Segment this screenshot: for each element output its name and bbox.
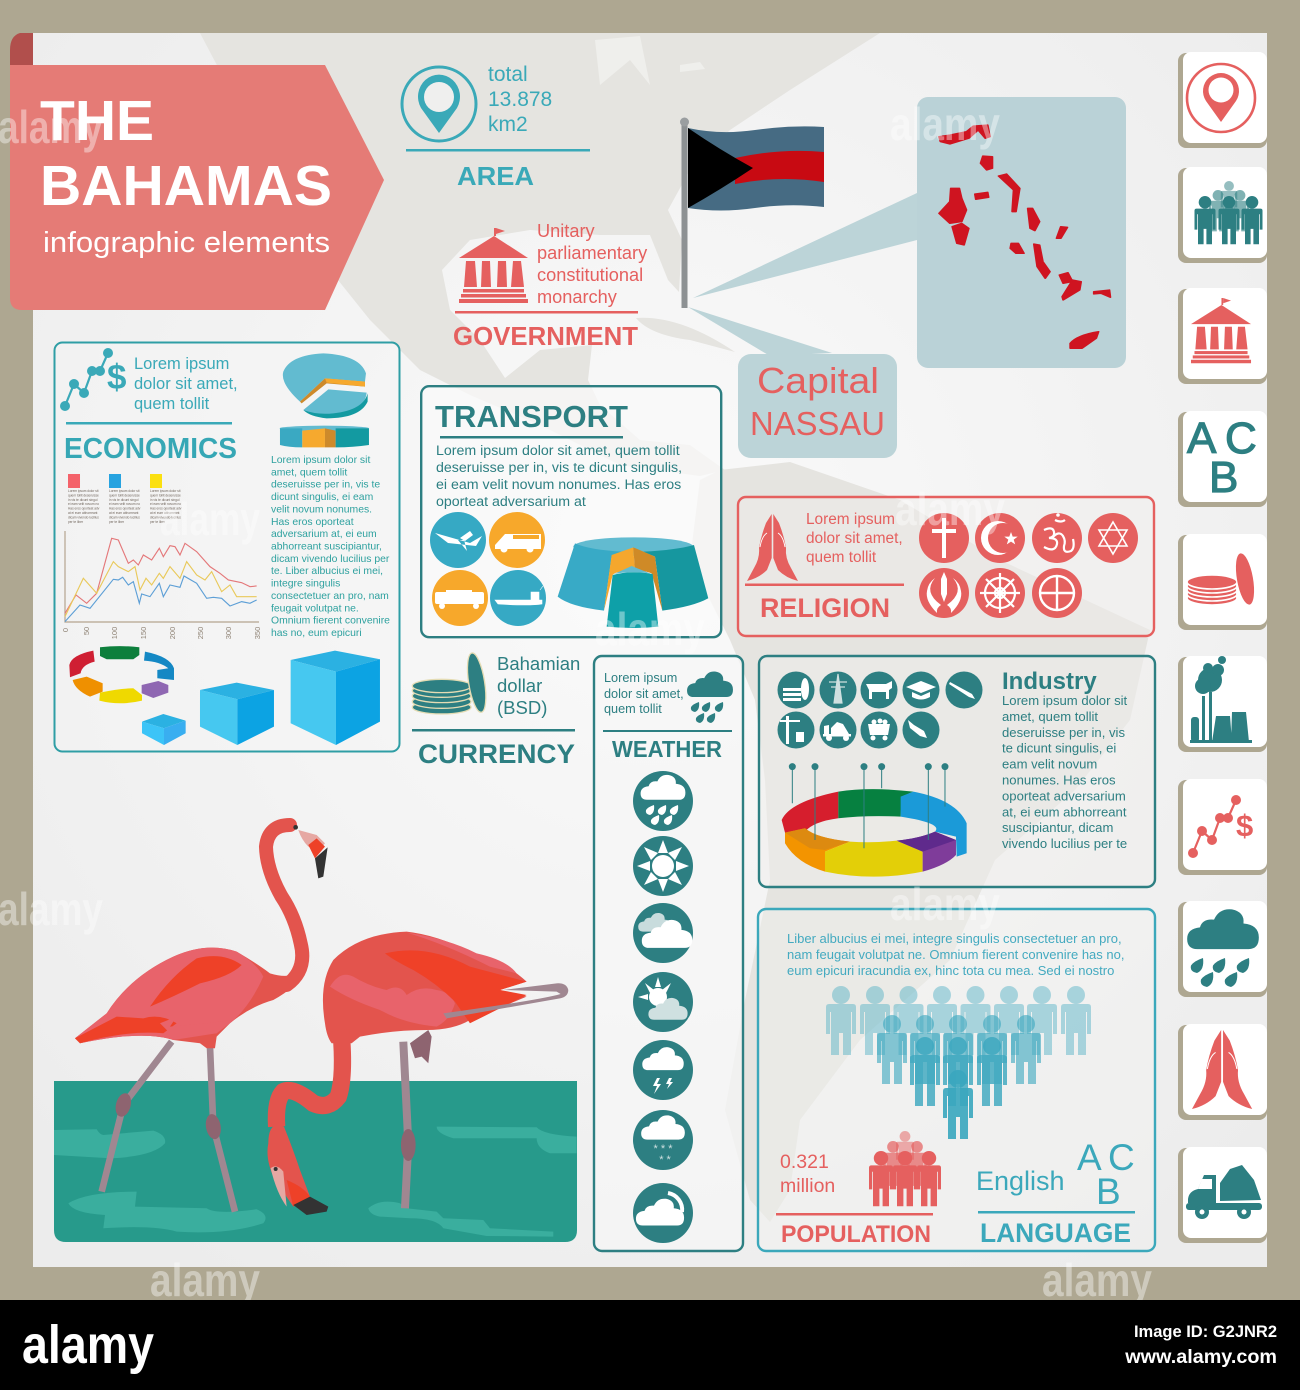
chart legend: ei eam velit novum no bbox=[68, 502, 99, 506]
industry body text: amet, quem tollit bbox=[1002, 709, 1098, 724]
icon: sun bbox=[633, 836, 693, 896]
icon: airplane bbox=[430, 512, 486, 568]
area block: 13.878 bbox=[488, 88, 552, 111]
currency block: CURRENCY bbox=[418, 739, 575, 769]
economics body text: velit novum nonumes. bbox=[271, 504, 372, 515]
icon: rain bbox=[633, 771, 693, 831]
tile: population bbox=[1178, 167, 1267, 263]
chart: line chart: 200 bbox=[168, 627, 177, 639]
currency block: dollar bbox=[497, 675, 542, 696]
tile: weather bbox=[1178, 901, 1267, 997]
religion intro text: Lorem ipsum bbox=[806, 511, 895, 528]
icon: sun and cloud bbox=[633, 972, 693, 1032]
population heading: POPULATION bbox=[781, 1221, 931, 1248]
population intro text: eum epicuri iracundia ex, hinc tota cu mea. Sed ei nostro bbox=[787, 963, 1114, 978]
stock watermarks bbox=[0, 98, 1152, 1306]
economics body text: amet, quem tollit bbox=[271, 467, 347, 478]
economics intro text: quem tollit bbox=[134, 395, 210, 413]
religion intro text: quem tollit bbox=[806, 549, 877, 566]
capital callout bbox=[738, 354, 897, 458]
chart: line chart: 250 bbox=[196, 627, 205, 639]
transport body text: Lorem ipsum dolor sit amet, quem tollit bbox=[436, 443, 680, 459]
industry body text: nonumes. Has eros bbox=[1002, 772, 1116, 788]
currency block: Bahamian bbox=[497, 653, 580, 674]
language label: English bbox=[976, 1166, 1065, 1196]
economics intro text: Lorem ipsum bbox=[134, 355, 229, 373]
tile: currency bbox=[1178, 534, 1267, 630]
chart: line chart: 100 bbox=[110, 627, 119, 639]
transport body text: ei eam velit novum nonumes. Has eros bbox=[436, 477, 681, 493]
panel: religion bbox=[738, 497, 1154, 636]
icon: moon and cloud bbox=[633, 1183, 693, 1243]
area block: km2 bbox=[488, 113, 528, 136]
icon: thunderstorm bbox=[633, 1040, 693, 1100]
chart legend: Has eros oporteat adv bbox=[109, 507, 141, 511]
tile: economics bbox=[1178, 779, 1267, 875]
pictogram: crowd bbox=[826, 986, 1091, 1139]
chart: line chart: 350 bbox=[253, 627, 262, 639]
chart: line chart: 50 bbox=[82, 627, 91, 635]
economics body text: integre singulis bbox=[271, 579, 340, 590]
panel: weather bbox=[594, 656, 743, 1251]
industry body text: Lorem ipsum dolor sit bbox=[1002, 693, 1128, 708]
chart legend: per te liber bbox=[150, 520, 166, 524]
industry body text: eam velit novum bbox=[1002, 757, 1097, 772]
chart legend: dicam vivendo lucilius bbox=[109, 515, 140, 519]
chart legend: at ei eum abhorreant bbox=[109, 511, 139, 515]
language heading: LANGUAGE bbox=[980, 1218, 1131, 1248]
chart legend: Lorem ipsum dolor sit bbox=[109, 489, 140, 493]
title text: infographic elements bbox=[43, 227, 330, 259]
economics intro text: dolor sit amet, bbox=[134, 375, 238, 393]
icon: government building bbox=[459, 228, 528, 303]
water ripples bbox=[54, 1127, 577, 1237]
chart legend: in vis te dicunt singul bbox=[150, 498, 180, 502]
economics body text: adversarium at, ei eum bbox=[271, 529, 377, 540]
tile: language: A bbox=[1187, 414, 1217, 463]
currency block bbox=[412, 652, 580, 769]
chart legend: ei eam velit novum no bbox=[109, 502, 140, 506]
footer url: www.alamy.com bbox=[1124, 1346, 1277, 1368]
icon: truck bbox=[820, 712, 856, 748]
industry body text: deseruisse per in, vis bbox=[1002, 725, 1125, 740]
chart legend: in vis te dicunt singul bbox=[109, 498, 139, 502]
icon: coins bbox=[412, 652, 489, 714]
chart: 3d pie bbox=[558, 537, 708, 628]
flamingo: feeding bbox=[267, 932, 568, 1215]
icon: power pylon bbox=[820, 672, 856, 708]
economics body text: has no, eum epicuri bbox=[271, 628, 362, 639]
icon: red people bbox=[869, 1131, 941, 1206]
economics body text: Has eros oporteat bbox=[271, 517, 354, 528]
icon: crane and factory bbox=[778, 712, 814, 748]
population intro text: nam feugait volutpat ne. Omnium fierent convenire has no, bbox=[787, 947, 1124, 962]
industry body text: at, ei eum abhorreant bbox=[1002, 804, 1127, 819]
icon: ship bbox=[490, 570, 546, 626]
weather intro text: dolor sit amet, bbox=[604, 687, 684, 701]
industry heading: Industry bbox=[1002, 668, 1097, 695]
chart legend: quem tollit deseruisse bbox=[150, 493, 181, 497]
panel: transport bbox=[421, 386, 721, 637]
stock watermarks: alamy bbox=[150, 1254, 260, 1306]
chart legend bbox=[68, 474, 182, 524]
icon: cattle bbox=[860, 672, 898, 708]
economics body text: dicunt singulis, ei eam bbox=[271, 492, 373, 503]
chart: segmented ring bbox=[69, 646, 174, 703]
icon: coins bbox=[778, 672, 814, 708]
weather intro text: quem tollit bbox=[604, 702, 662, 716]
water bbox=[54, 1081, 577, 1242]
chart: isometric cubes bbox=[142, 651, 380, 745]
map gaps: great lakes bbox=[595, 36, 705, 85]
industry body text: te dicunt singulis, ei bbox=[1002, 741, 1116, 756]
world map backdrop bbox=[200, 33, 1150, 1222]
footer logo: alamy bbox=[22, 1315, 154, 1375]
icon: rifle bbox=[946, 672, 982, 708]
icon: star of david bbox=[1088, 513, 1138, 563]
icon: christian cross bbox=[919, 513, 969, 563]
chart legend: dicam vivendo lucilius bbox=[68, 515, 99, 519]
economics body text: dicam vivendo lucilius per bbox=[271, 554, 390, 565]
panel: industry bbox=[759, 656, 1155, 887]
economics heading: ECONOMICS bbox=[64, 433, 237, 465]
stock watermarks: alamy bbox=[0, 883, 103, 935]
stock watermarks: alamy bbox=[1042, 1254, 1152, 1306]
language letters bbox=[1077, 1137, 1135, 1212]
tile: economics: $ bbox=[1236, 808, 1253, 843]
icon: location pin bbox=[402, 67, 476, 141]
icon: syringe bbox=[902, 712, 940, 748]
economics body text: Omnium fierent convenire bbox=[271, 616, 390, 627]
government block: constitutional bbox=[537, 265, 643, 285]
stock watermarks: alamy bbox=[890, 98, 1000, 150]
population figure: million bbox=[780, 1175, 835, 1197]
economics body text: Lorem ipsum dolor sit bbox=[271, 455, 370, 466]
tile: mining truck bbox=[1178, 1147, 1267, 1243]
flag of the Bahamas bbox=[680, 118, 824, 308]
government block: Unitary bbox=[537, 221, 596, 241]
sidebar icon tiles bbox=[1178, 52, 1267, 1243]
economics body text: te. Liber albucius ei mei, bbox=[271, 566, 383, 577]
economics body text: consectetuer an pro, nam bbox=[271, 591, 389, 602]
title text bbox=[40, 89, 332, 259]
icon: cloudy bbox=[633, 903, 693, 963]
area block: AREA bbox=[457, 161, 534, 191]
religion heading: RELIGION bbox=[760, 593, 890, 623]
chart legend: quem tollit deseruisse bbox=[109, 493, 140, 497]
chart legend: quem tollit deseruisse bbox=[68, 493, 99, 497]
language letters: A bbox=[1077, 1137, 1102, 1178]
chart legend: at ei eum abhorreant bbox=[68, 511, 98, 515]
illustration: flamingos in water bbox=[54, 825, 577, 1242]
currency block: (BSD) bbox=[497, 697, 547, 718]
capital callout: NASSAU bbox=[750, 405, 885, 442]
icon: praying hands bbox=[747, 514, 798, 581]
icon: graduation cap bbox=[902, 672, 940, 708]
chart legend: dicam vivendo lucilius bbox=[150, 515, 181, 519]
chart legend: ei eam velit novum no bbox=[150, 502, 181, 506]
tile: industry bbox=[1178, 656, 1267, 752]
icon: snow: * * * bbox=[654, 1143, 673, 1155]
chart legend: Lorem ipsum dolor sit bbox=[150, 489, 181, 493]
economics body text: deseruisse per in, vis te bbox=[271, 480, 380, 491]
stock watermarks: alamy bbox=[0, 101, 103, 153]
chart legend: at ei eum abhorreant bbox=[150, 511, 180, 515]
stock watermarks: alamy bbox=[895, 483, 1005, 535]
flamingo: standing bbox=[75, 825, 328, 1212]
panel: economics bbox=[54, 342, 400, 752]
economics body text: feugait volutpat ne. bbox=[271, 603, 359, 614]
callout wedges bbox=[688, 193, 917, 356]
stock watermarks: alamy bbox=[595, 603, 705, 655]
government block: parliamentary bbox=[537, 243, 648, 263]
transport body text: deseruisse per in, vis te dicunt singulis, bbox=[436, 460, 682, 476]
icon: circled cross bbox=[1032, 568, 1082, 618]
chart legend: Lorem ipsum dolor sit bbox=[68, 489, 99, 493]
stock watermarks: alamy bbox=[160, 493, 260, 545]
language letters: B bbox=[1096, 1171, 1121, 1212]
chart legend: per te liber bbox=[68, 520, 84, 524]
icon: train bbox=[432, 570, 488, 626]
industry body text: vivendo lucilius per te bbox=[1002, 836, 1127, 851]
chart: line chart bbox=[61, 531, 262, 639]
population intro text: Liber albucius ei mei, integre singulis consectetuer an pro, bbox=[787, 931, 1122, 946]
industry body text: oporteat adversarium bbox=[1002, 788, 1126, 803]
map islands bbox=[939, 125, 1110, 348]
area block bbox=[402, 63, 590, 191]
icon: snow bbox=[633, 1110, 693, 1170]
government block bbox=[453, 221, 648, 351]
icon: snow: * * bbox=[659, 1154, 672, 1166]
weather heading: WEATHER bbox=[612, 736, 722, 762]
footer bar bbox=[0, 1300, 1300, 1390]
stock watermarks: alamy bbox=[890, 878, 1000, 930]
language letters: C bbox=[1108, 1137, 1135, 1178]
tile: language: C bbox=[1225, 414, 1257, 463]
chart: line chart: 300 bbox=[224, 627, 233, 639]
chart: 3d ring bbox=[782, 764, 967, 877]
religion intro text: dolor sit amet, bbox=[806, 530, 903, 547]
icon: trend and dollar: $ bbox=[107, 358, 126, 397]
map of the Bahamas panel bbox=[917, 97, 1126, 368]
icon: om bbox=[1032, 513, 1082, 563]
transport heading: TRANSPORT bbox=[435, 399, 628, 434]
title text: BAHAMAS bbox=[40, 154, 332, 218]
tile: government bbox=[1178, 288, 1267, 384]
icon: khanda bbox=[919, 568, 969, 618]
icon: bus bbox=[489, 512, 545, 568]
chart legend: per te liber bbox=[109, 520, 125, 524]
title text: THE bbox=[40, 89, 154, 153]
tile: area bbox=[1178, 52, 1267, 148]
government block: monarchy bbox=[537, 287, 618, 307]
title banner bbox=[10, 33, 384, 310]
government block: GOVERNMENT bbox=[453, 323, 638, 351]
transport body text: oporteat adversarium at bbox=[436, 494, 586, 510]
chart: pie bbox=[283, 353, 368, 418]
icon: trend and dollar bbox=[60, 348, 126, 411]
industry body text: suscipiantur, dicam bbox=[1002, 820, 1113, 835]
tile: language: B bbox=[1209, 453, 1238, 502]
footer image id: Image ID: G2JNR2 bbox=[1134, 1323, 1277, 1341]
tile: religion bbox=[1178, 1024, 1267, 1120]
chart legend: Has eros oporteat adv bbox=[150, 507, 182, 511]
chart: line chart: 150 bbox=[139, 627, 148, 639]
chart: pie side view bbox=[280, 426, 369, 447]
panel: population and language bbox=[758, 909, 1155, 1251]
chart: line chart: 0 bbox=[61, 628, 70, 632]
icon: crescent and star bbox=[975, 513, 1025, 563]
icon: rain cloud bbox=[687, 672, 733, 723]
weather intro text: Lorem ipsum bbox=[604, 671, 677, 685]
icon: mine cart bbox=[860, 712, 898, 748]
tile: language bbox=[1178, 411, 1267, 507]
economics body text: abhorreant suscipiantur, bbox=[271, 542, 382, 553]
area block: total bbox=[488, 63, 528, 86]
population figure: 0.321 bbox=[780, 1151, 829, 1173]
icon: dharma wheel bbox=[975, 568, 1025, 618]
chart legend: in vis te dicunt singul bbox=[68, 498, 98, 502]
chart pin markers bbox=[789, 764, 948, 848]
chart legend: Has eros oporteat adv bbox=[68, 507, 100, 511]
capital callout: Capital bbox=[757, 360, 879, 401]
